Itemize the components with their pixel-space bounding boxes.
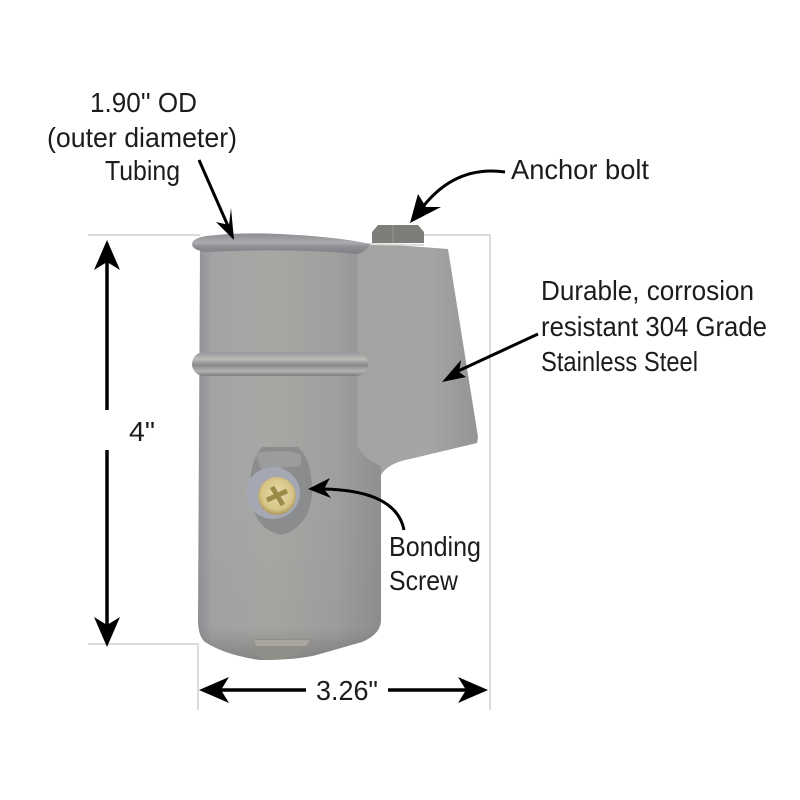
label: bonding screw: Screw: [389, 565, 459, 596]
foot tab highlight: [254, 640, 310, 646]
label: tubing: Tubing: [105, 155, 180, 186]
screw head: [258, 477, 296, 515]
dimension guide lines: [88, 235, 490, 710]
foot tab: [254, 639, 310, 660]
phillips recess: [267, 487, 287, 505]
arrow: tubing: [199, 160, 234, 240]
arrow: bonding screw: [308, 478, 404, 530]
screw boss: [250, 447, 312, 535]
arrow: anchor bolt: [410, 171, 505, 223]
top rim: [192, 233, 370, 254]
dimension: height 4 inches: 4": [129, 416, 155, 447]
label: bonding screw: Bonding: [389, 531, 481, 562]
label: stainless steel: Durable, corrosion: [541, 275, 754, 306]
bracket block: [357, 243, 478, 480]
anchor bolt head: [370, 225, 424, 245]
dimension: width 3.26 inches: [199, 675, 488, 706]
middle rib: [192, 352, 368, 376]
dimension: height 4 inches: [94, 240, 155, 647]
screw slot: [255, 451, 301, 470]
label: tubing: (outer diameter): [47, 122, 237, 153]
label: anchor bolt: Anchor bolt: [511, 154, 649, 185]
label: stainless steel: resistant 304 Grade: [541, 311, 767, 342]
label: bonding screw: [389, 531, 481, 596]
screw washer: [246, 467, 300, 519]
arrow: stainless steel: [442, 334, 538, 382]
dimension: width 3.26 inches: 3.26": [316, 675, 378, 706]
label: tubing: [47, 87, 237, 186]
label: stainless steel: Stainless Steel: [541, 346, 698, 377]
label: stainless steel: [541, 275, 767, 377]
photo: stainless steel fitting: [192, 225, 478, 660]
tube body: [198, 248, 381, 660]
tube body bottom shading: [198, 500, 381, 660]
label: tubing: 1.90'' OD: [90, 87, 197, 118]
